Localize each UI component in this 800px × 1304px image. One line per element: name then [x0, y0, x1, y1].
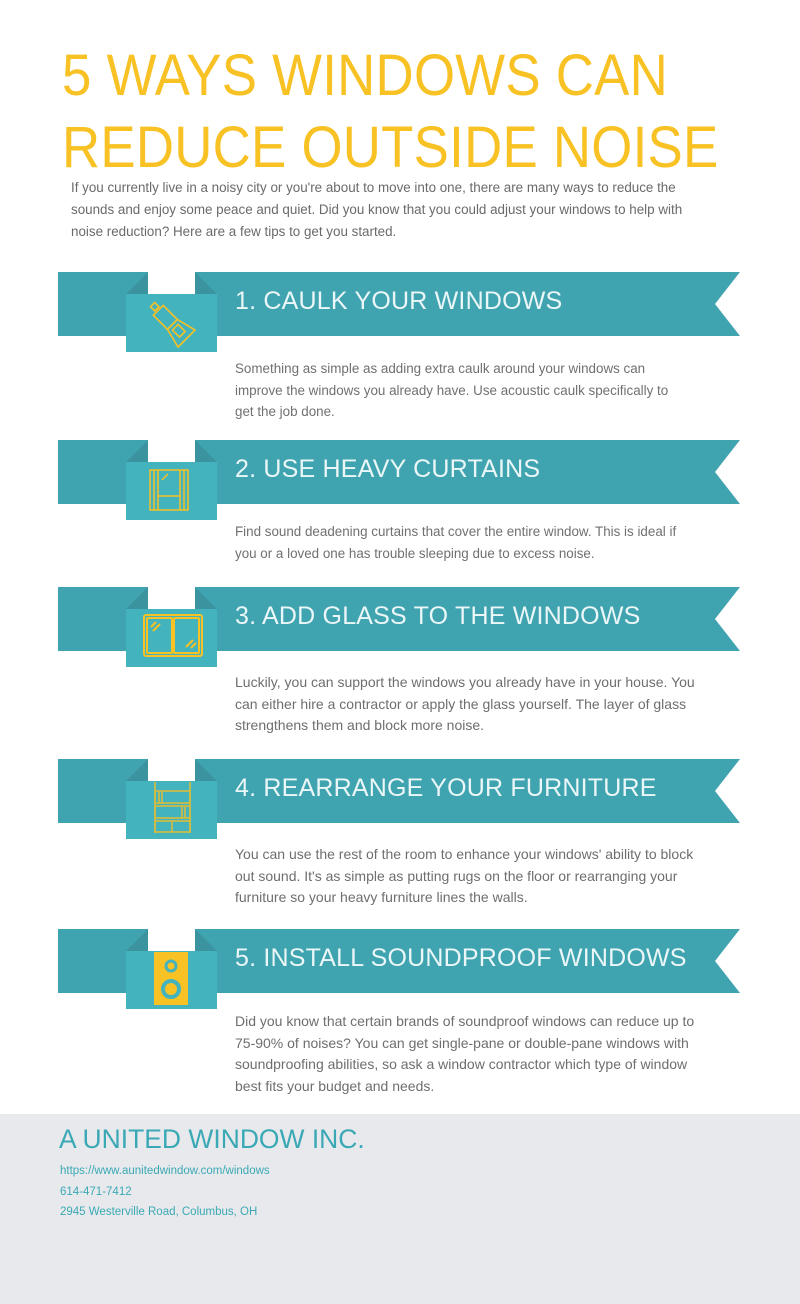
- title: REDUCE OUTSIDE NOISE: [62, 115, 719, 180]
- footer: [0, 1114, 800, 1304]
- intro text: If you currently live in a noisy city or you're about to move into one, there are many ways to reduce the sounds and enjoy some peace and quiet. Did you know that you could adjust your windows to help with noise reduction? Here are a few tips to get you started.: [71, 180, 682, 239]
- title: [62, 43, 719, 180]
- heading 2: 2. USE HEAVY CURTAINS: [235, 455, 540, 483]
- text 5: Did you know that certain brands of soundproof windows can reduce up to 75-90% of noises? You can get single-pane or double-pane windows with soundproofing abilities, so ask a window contractor which type of window best fits your budget and needs.: [235, 1013, 694, 1094]
- heading 1: 1. CAULK YOUR WINDOWS: [235, 287, 562, 315]
- text 2: Find sound deadening curtains that cover the entire window. This is ideal if you or a loved one has trouble sleeping due to excess noise.: [235, 524, 676, 560]
- contact info: 614-471-7412: [60, 1186, 132, 1198]
- title: 5 WAYS WINDOWS CAN: [62, 43, 668, 108]
- contact info: [60, 1165, 270, 1218]
- heading 5: 5. INSTALL SOUNDPROOF WINDOWS: [235, 944, 687, 972]
- ribbon 3: [58, 587, 740, 667]
- ribbon 2: [58, 440, 740, 520]
- ribbon 1: [58, 272, 740, 352]
- text 3: Luckily, you can support the windows you already have in your house. You can either hire a contractor or apply the glass yourself. The layer of glass strengthens them and block more noise.: [235, 674, 695, 733]
- text 4: You can use the rest of the room to enhance your windows' ability to block out sound. It's as simple as putting rugs on the floor or rearranging your furniture so your heavy furniture lines the walls.: [235, 846, 693, 905]
- heading 3: 3. ADD GLASS TO THE WINDOWS: [235, 602, 640, 630]
- company name: A UNITED WINDOW INC.: [59, 1124, 365, 1154]
- contact info: https://www.aunitedwindow.com/windows: [60, 1165, 270, 1177]
- ribbon 4: [58, 759, 740, 839]
- heading 4: 4. REARRANGE YOUR FURNITURE: [235, 774, 657, 802]
- ribbon 5: [58, 929, 740, 1009]
- text 1: Something as simple as adding extra caulk around your windows can improve the windows you already have. Use acoustic caulk specifically to get the job done.: [235, 361, 668, 419]
- contact info: 2945 Westerville Road, Columbus, OH: [60, 1206, 257, 1218]
